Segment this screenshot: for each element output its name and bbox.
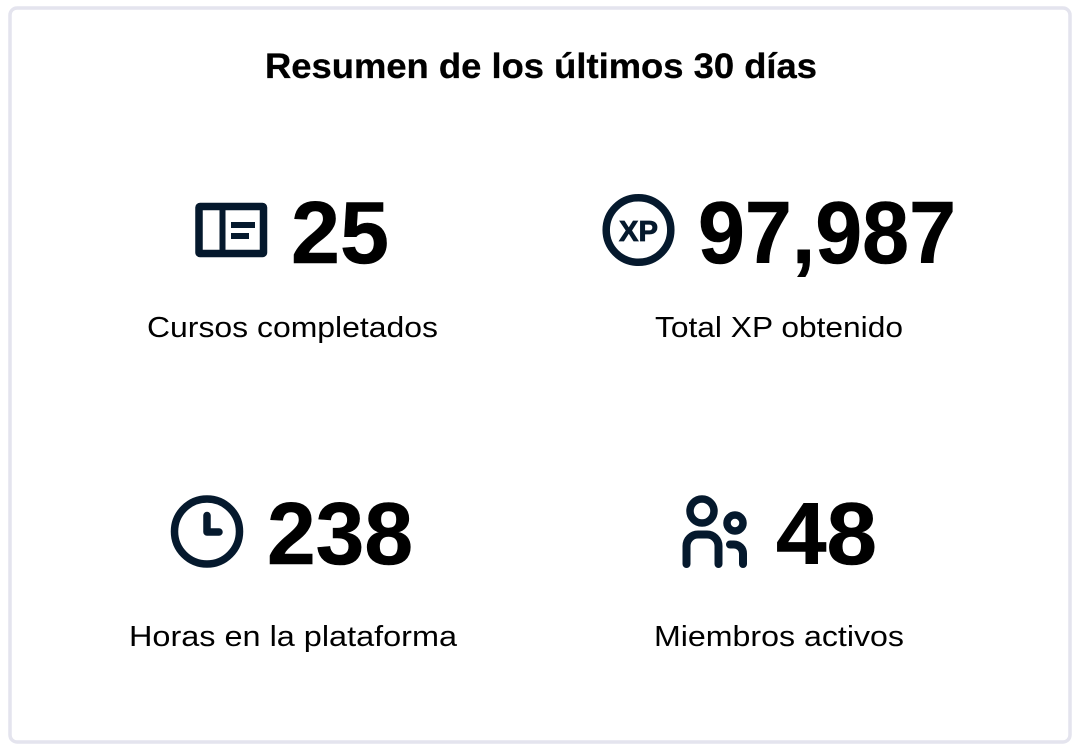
title: Resumen de los últimos 30 días [265, 47, 817, 86]
label: members: Miembros activos [654, 621, 904, 653]
label: hours: Horas en la plataforma [129, 621, 458, 653]
stat: XP value: 97,987 [698, 183, 956, 282]
icon: book [199, 206, 264, 254]
panel: platform hours [129, 484, 458, 653]
stat: hours value: 238 [267, 484, 413, 583]
panel: completed courses [147, 183, 438, 344]
label: courses: Cursos completados [147, 312, 438, 344]
icon: XP badge: XP [619, 216, 658, 248]
icon: XP badge [606, 198, 671, 262]
icon: people [686, 499, 743, 564]
panel: total XP [606, 183, 956, 344]
stat: members value: 48 [776, 484, 877, 583]
icon: clock [174, 499, 240, 564]
label: XP: Total XP obtenido [655, 312, 903, 344]
stat: courses value: 25 [291, 183, 389, 282]
panel: active members [654, 484, 904, 653]
